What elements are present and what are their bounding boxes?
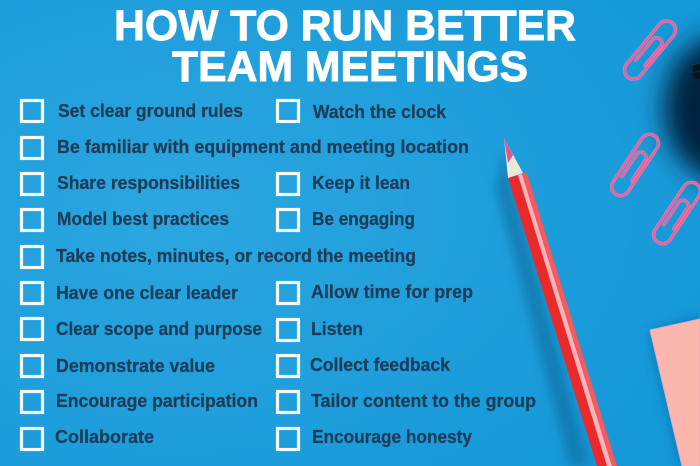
item: Model best practices: Model best practices [57, 209, 229, 229]
item: Be engaging: Be engaging [312, 209, 415, 229]
item: Be engaging [278, 209, 415, 230]
item: Collect feedback: Collect feedback [310, 355, 451, 375]
item: Have one clear leader: Have one clear leader [56, 283, 238, 303]
item: Share responsibilities: Share responsibilities [57, 173, 240, 193]
item: Clear scope and purpose: Clear scope and purpose [56, 319, 262, 339]
shadow of dark object [664, 36, 700, 180]
item: Listen: Listen [311, 319, 363, 339]
icon: paperclip middle [608, 131, 662, 199]
title [114, 2, 576, 91]
item: Listen [278, 319, 363, 340]
item: Keep it lean [278, 173, 410, 194]
item: Collaborate [22, 427, 154, 450]
checklist [22, 100, 536, 450]
item: Keep it lean: Keep it lean [312, 173, 410, 193]
item: Set clear ground rules: Set clear ground rules [58, 101, 243, 121]
icon: paperclip right [650, 179, 700, 247]
item: Encourage honesty: Encourage honesty [312, 427, 472, 447]
item: Allow time for prep: Allow time for prep [311, 282, 473, 302]
shadow of pink note [648, 315, 700, 466]
title: TEAM MEETINGS [172, 43, 528, 91]
item: Demonstrate value: Demonstrate value [56, 356, 215, 376]
item: Encourage participation: Encourage participation [56, 391, 258, 411]
item: Be familiar with equipment: Be familiar with equipment and meeting location [57, 137, 469, 157]
item: Take notes: Take notes, minutes, or record the meeting [56, 246, 416, 266]
icon: paperclip top [621, 17, 679, 83]
item: Watch the clock: Watch the clock [313, 102, 447, 122]
title: HOW TO RUN BETTER [114, 2, 576, 50]
icon: dark object fragment [692, 64, 700, 79]
shadow of pencil [496, 150, 590, 466]
icon: red pencil [504, 138, 617, 466]
item: Tailor content to the group: Tailor content to the group [311, 391, 536, 411]
item: Collaborate: Collaborate [55, 427, 154, 447]
pink sticky note [650, 319, 700, 466]
